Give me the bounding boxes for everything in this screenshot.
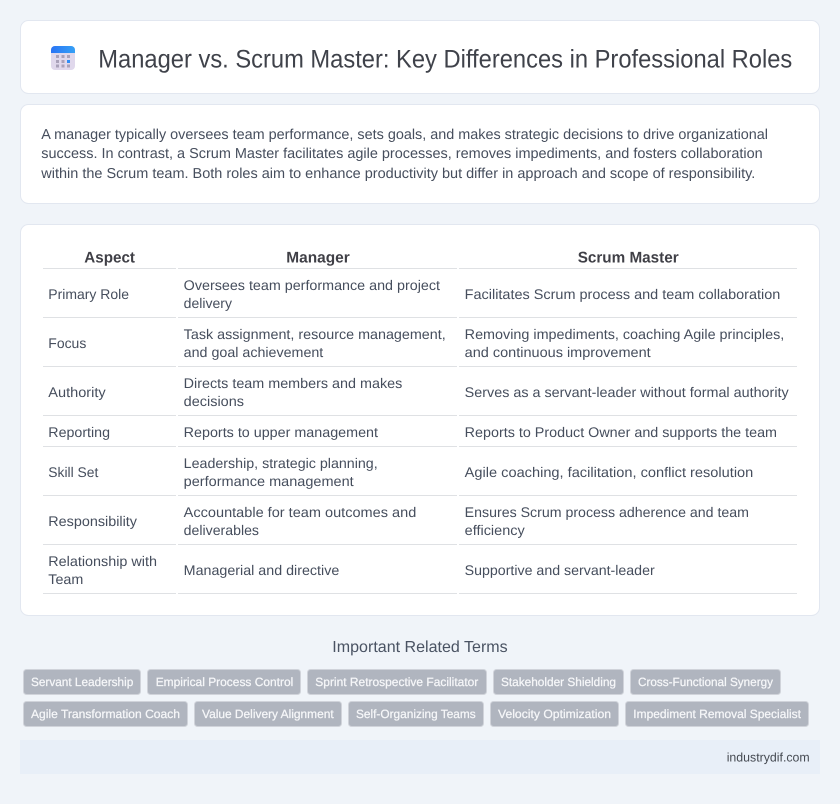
table header row <box>43 250 797 269</box>
table row: Reporting: Reporting <box>48 424 110 440</box>
table row: Primary Role: Facilitates Scrum process and team collaboration <box>465 286 780 302</box>
table row: Primary Role: delivery <box>184 295 232 311</box>
heading: related terms: Important Related Terms <box>332 639 508 656</box>
table row: Skill Set: Agile coaching, facilitation, conflict resolution <box>465 464 753 480</box>
table row: Skill Set: performance management <box>184 473 354 489</box>
table row: Responsibility: Responsibility <box>48 513 137 529</box>
table row: Focus: and goal achievement <box>184 344 323 360</box>
tag: Velocity Optimization: Velocity Optimization <box>498 707 611 721</box>
panel: description <box>20 104 820 204</box>
tag: Servant Leadership: Servant Leadership <box>31 675 134 689</box>
tag: Sprint Retrospective Facilitator: Sprint Retrospective Facilitator <box>315 675 478 689</box>
tag: Impediment Removal Specialist <box>626 702 808 726</box>
table row: Authority: Directs team members and makes <box>184 375 402 391</box>
footer <box>20 740 820 774</box>
table row: Focus <box>43 326 797 367</box>
table header row: Scrum Master <box>578 250 679 267</box>
table row: Reporting: Reports to upper management <box>184 424 378 440</box>
table row: Focus: Focus <box>48 335 86 351</box>
icon: calendar <box>51 46 75 70</box>
panel: related term tags <box>24 670 808 726</box>
table row: Authority: decisions <box>184 393 244 409</box>
text block: summary: A manager typically oversees team performance, sets goals, and makes strategic decisions to drive organizational <box>41 127 768 143</box>
table row: Focus: Removing impediments, coaching Agile principles, <box>465 326 784 342</box>
tag: Servant Leadership <box>24 670 140 694</box>
table row: Relationship with Team: Relationship with <box>48 553 157 569</box>
table row: Authority <box>43 375 797 416</box>
tag: Empirical Process Control: Empirical Process Control <box>156 675 293 689</box>
table row: Responsibility: efficiency <box>465 522 525 538</box>
table row: Focus: and continuous improvement <box>465 344 651 360</box>
tag: Empirical Process Control <box>148 670 300 694</box>
table row: Relationship with Team <box>43 553 797 594</box>
tag: Stakeholder Shielding: Stakeholder Shielding <box>501 675 616 689</box>
table row: Responsibility: deliverables <box>184 522 259 538</box>
tag: Cross-Functional Synergy <box>630 670 780 694</box>
title: Manager vs. Scrum Master: Key Differences in Professional Roles <box>98 46 792 74</box>
tag: Cross-Functional Synergy: Cross-Functional Synergy <box>638 675 773 689</box>
table row: Primary Role: Oversees team performance and project <box>184 277 440 293</box>
tag: Value Delivery Alignment <box>194 702 342 726</box>
panel: comparison table <box>20 224 820 616</box>
footer source text: industrydif.com <box>727 750 810 764</box>
table row: Reporting <box>43 424 797 447</box>
table row: Authority: Serves as a servant-leader without formal authority <box>465 384 789 400</box>
table row: Reporting: Reports to Product Owner and supports the team <box>465 424 777 440</box>
tag: Sprint Retrospective Facilitator <box>308 670 486 694</box>
tag: Velocity Optimization <box>490 702 618 726</box>
table row: Skill Set <box>43 455 797 496</box>
table row: Relationship with Team: Managerial and directive <box>184 562 340 578</box>
table row: Responsibility: Ensures Scrum process adherence and team <box>465 504 749 520</box>
table header row: Manager <box>286 250 350 267</box>
table row: Primary Role: Primary Role <box>48 286 129 302</box>
table row: Primary Role <box>43 277 797 318</box>
tag: Agile Transformation Coach <box>24 702 188 726</box>
table row: Relationship with Team: Supportive and servant-leader <box>465 562 655 578</box>
table row: Responsibility <box>43 504 797 545</box>
table row: Authority: Authority <box>48 384 106 400</box>
panel: header <box>20 20 820 94</box>
tag: Value Delivery Alignment: Value Delivery Alignment <box>202 707 334 721</box>
table row: Skill Set: Skill Set <box>48 464 98 480</box>
table header row: Aspect <box>84 250 135 267</box>
text block: summary: within the Scrum team. Both roles aim to enhance productivity but differ in approach and scope of responsibility. <box>40 166 755 182</box>
table row: Responsibility: Accountable for team outcomes and <box>184 504 416 520</box>
text block: summary <box>40 127 768 182</box>
tag: Self-Organizing Teams: Self-Organizing Teams <box>356 707 476 721</box>
tag: Impediment Removal Specialist: Impediment Removal Specialist <box>633 707 802 721</box>
text block: summary: success. In contrast, a Scrum Master facilitates agile processes, removes impediments, and fosters collaboration <box>41 146 763 162</box>
table row: Skill Set: Leadership, strategic planning, <box>184 455 378 471</box>
tag: Agile Transformation Coach: Agile Transformation Coach <box>31 707 180 721</box>
table row: Relationship with Team: Team <box>48 571 83 587</box>
tag: Stakeholder Shielding <box>494 670 624 694</box>
tag: Self-Organizing Teams <box>348 702 484 726</box>
table row: Focus: Task assignment, resource management, <box>184 326 446 342</box>
